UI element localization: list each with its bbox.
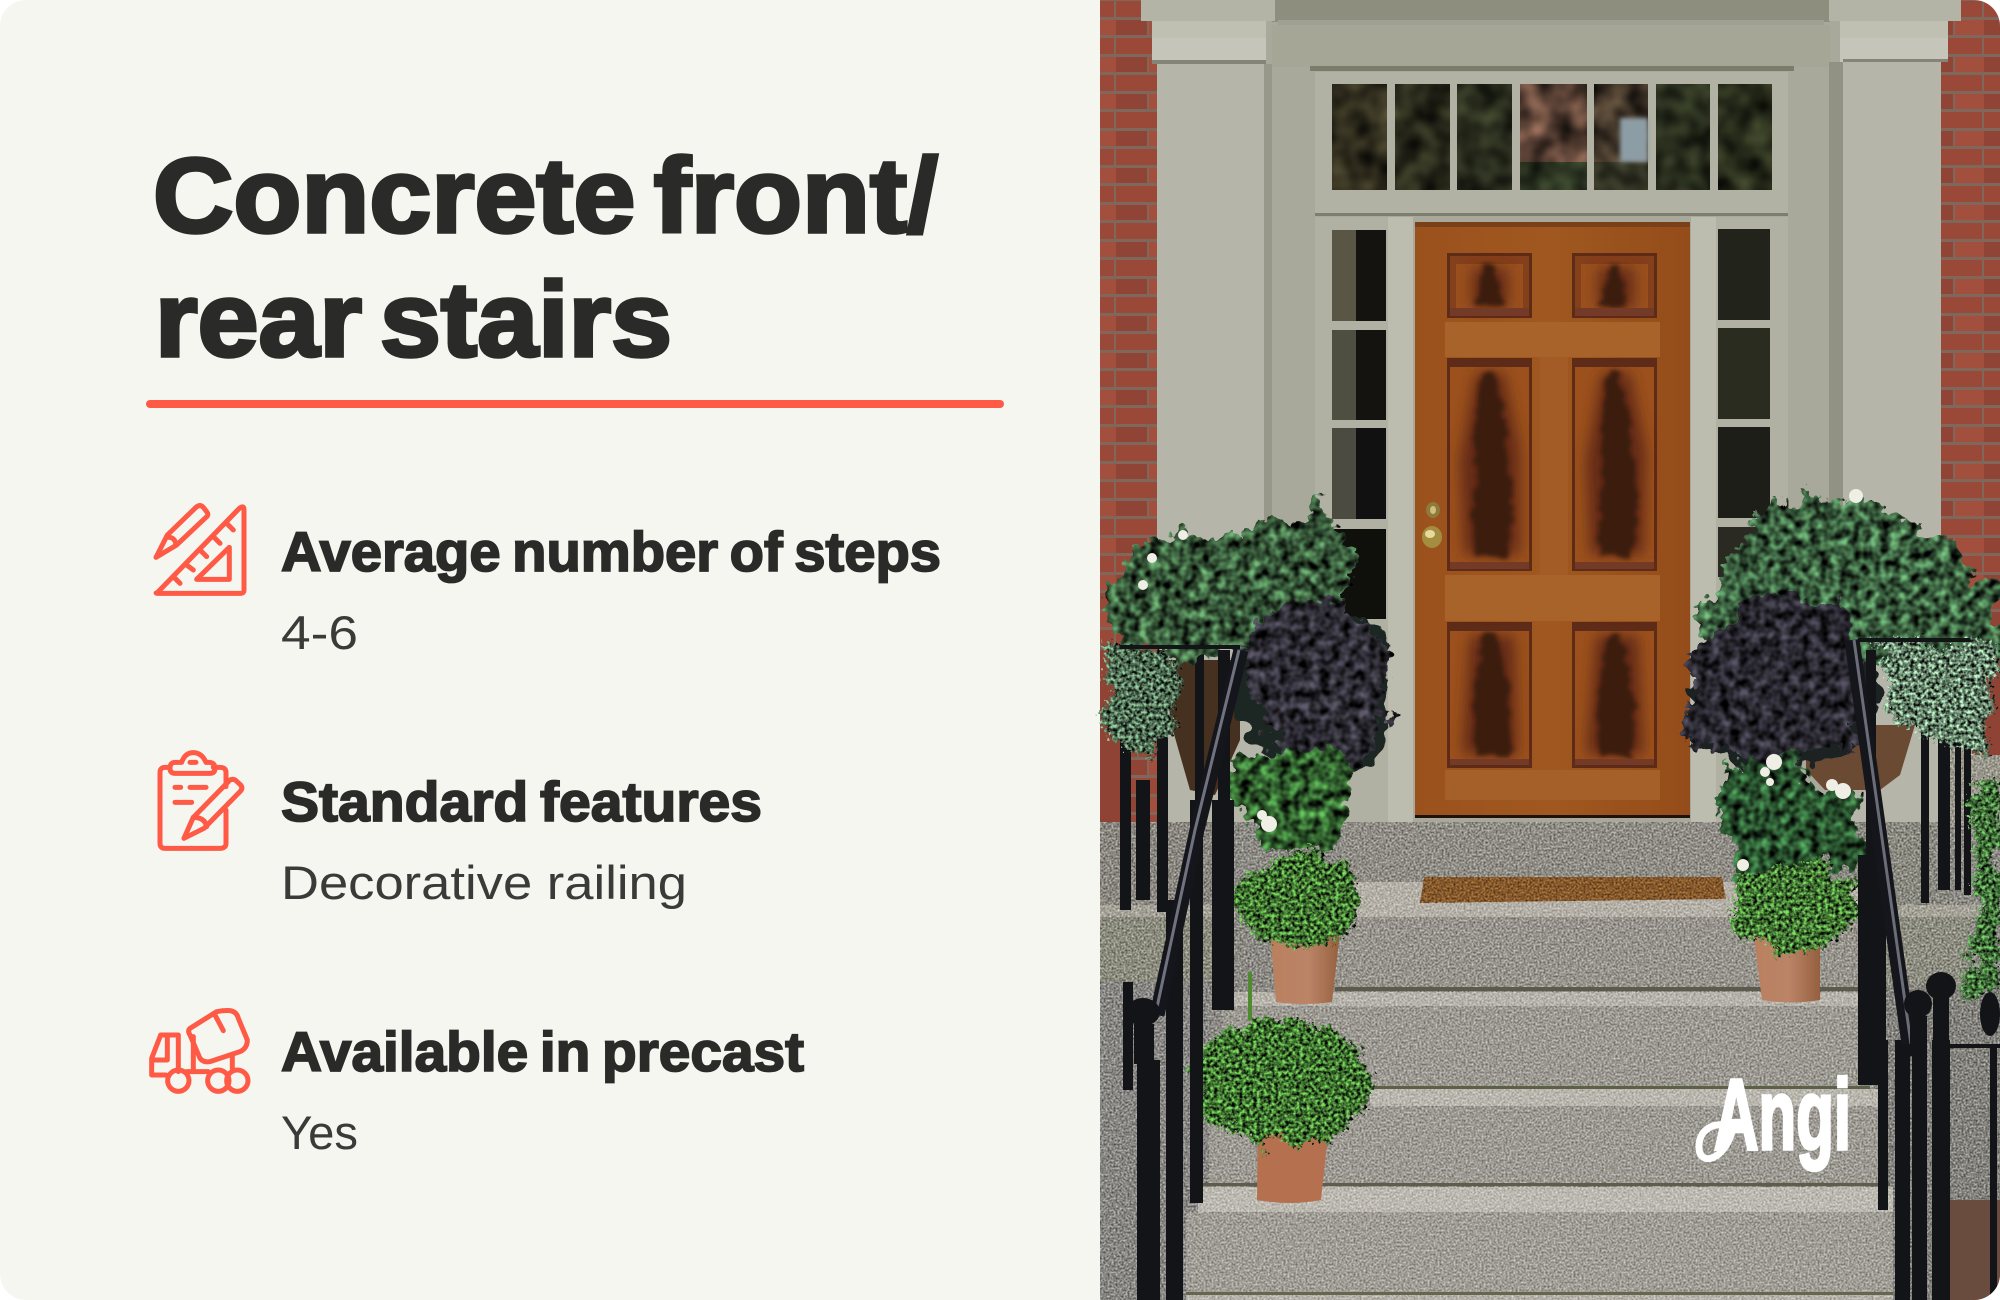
foliage: small leaf plants [1194, 780, 2000, 1142]
left railing [1120, 645, 1241, 1300]
title: Concrete front/ [153, 137, 938, 255]
item: available in precast: Yes [281, 1106, 358, 1159]
transom window [1315, 72, 1788, 216]
door surround [1260, 0, 1850, 830]
right newel posts [1904, 972, 2000, 1056]
left newel post [1133, 998, 1160, 1064]
right pilaster [1829, 0, 1961, 832]
item: standard features: Decorative railing [281, 856, 687, 909]
item: standard features: Standard features [281, 770, 762, 833]
item: average number of steps: Average number of steps [281, 520, 941, 583]
ground and bricks at sides [1100, 650, 2000, 1300]
title underline [146, 400, 1004, 408]
icon: concrete mixer truck [152, 1010, 248, 1091]
urns behind plants [1168, 660, 1915, 795]
foliage: flowering plants [1232, 752, 1862, 872]
item: standard features [281, 770, 762, 909]
title [156, 153, 940, 359]
item: available in precast: Available in precast [281, 1020, 804, 1083]
icon: ruler triangle and pencil [156, 506, 244, 593]
brick walls [1100, 0, 2000, 830]
white flowers [1138, 489, 1863, 871]
logo: Angi: Angi [1714, 1059, 1851, 1171]
panel mouldings [1450, 308, 1654, 765]
terracotta pots [1257, 915, 1820, 1203]
panel: text card [0, 0, 1101, 1300]
icon: clipboard with pencil [160, 753, 242, 848]
right railing [1852, 638, 2000, 1300]
door panels [1447, 253, 1657, 768]
wooden door [1415, 222, 1690, 818]
item: available in precast [281, 1030, 804, 1150]
item: average number of steps: 4-6 [281, 606, 358, 659]
right sidelight [1691, 217, 1770, 822]
rear railings [1120, 650, 1971, 912]
item: average number of steps [281, 530, 940, 650]
logo: Angi [1696, 1074, 1848, 1172]
stone stairs [1100, 735, 2000, 1300]
foliage: upper left planter [1102, 505, 1390, 778]
title: rear stairs [155, 261, 672, 379]
foliage: upper right planter [1690, 498, 2000, 772]
brass door hardware [1422, 502, 1442, 548]
left sidelight [1332, 217, 1413, 822]
mahogany flame grain [1460, 268, 1646, 755]
left pilaster [1141, 0, 1275, 834]
step shadow lines [1186, 987, 1893, 1295]
doormat [1420, 877, 1726, 903]
photo: front door with stone stairs [1100, 0, 2000, 1300]
